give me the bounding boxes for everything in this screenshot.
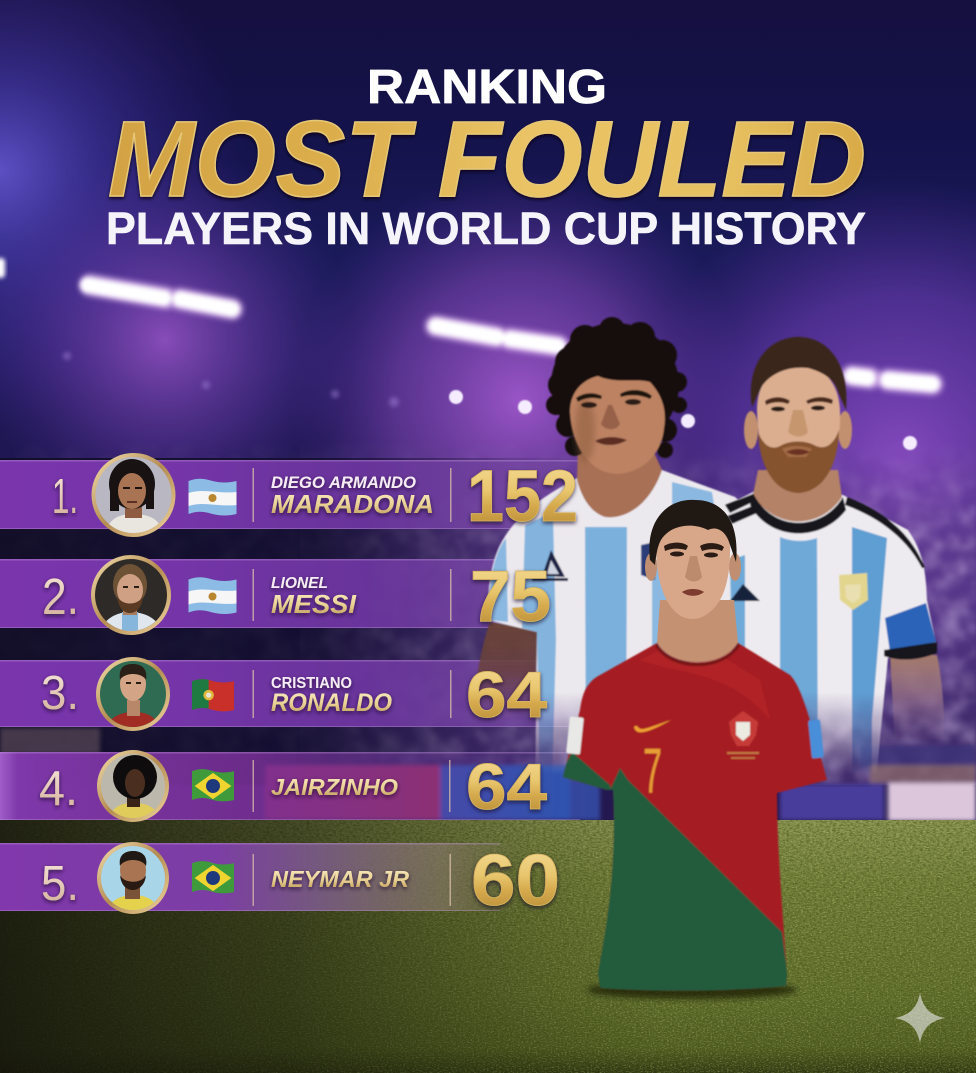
stadium background — [0, 0, 976, 820]
dim bokeh dots — [63, 352, 399, 407]
dividers — [252, 854, 451, 906]
shirt number: 7 — [643, 735, 662, 807]
face details — [664, 543, 724, 596]
logo — [532, 550, 568, 581]
player name: LIONEL — [271, 575, 328, 592]
title: most fouled: MOST FOULED — [108, 98, 866, 219]
neck — [657, 600, 738, 663]
collar stripes — [845, 497, 925, 568]
arm — [476, 622, 538, 714]
hair — [649, 500, 737, 565]
crowd stands — [68, 456, 976, 785]
row 2: Messi — [42, 555, 551, 637]
crest — [839, 573, 868, 610]
adidas mark — [730, 584, 760, 601]
rank number: 3. — [41, 667, 79, 720]
rank number: 2. — [42, 568, 79, 625]
player name — [271, 473, 434, 519]
crest — [641, 542, 655, 580]
player name: NEYMAR JR — [271, 866, 409, 892]
light bars — [90, 285, 932, 384]
player name — [271, 675, 393, 717]
beard — [758, 430, 839, 493]
player name: MARADONA — [271, 489, 434, 519]
collar — [655, 643, 740, 666]
rank number: 4. — [39, 762, 78, 816]
avatar — [92, 453, 176, 537]
captain armband — [885, 603, 936, 652]
dividers — [252, 569, 452, 621]
dividers — [252, 468, 452, 522]
value: 64 — [466, 750, 547, 823]
grass pitch — [0, 820, 976, 1073]
face — [570, 376, 665, 474]
nike swoosh — [634, 720, 671, 732]
flag: Brazil — [192, 768, 234, 804]
dividers — [252, 760, 450, 812]
player name: RONALDO — [271, 689, 393, 717]
rank number: 1. — [52, 470, 78, 524]
stripes — [779, 536, 818, 722]
flag: Argentina — [188, 478, 236, 518]
ears — [645, 553, 657, 581]
face — [756, 366, 842, 449]
row 3: Ronaldo — [41, 657, 547, 731]
green lower section — [555, 650, 790, 995]
flag: Portugal — [192, 678, 234, 714]
face details — [576, 390, 652, 445]
value: 64 — [466, 658, 547, 731]
title: ranking: RANKING — [367, 61, 607, 114]
title block — [106, 61, 866, 254]
hair — [546, 317, 687, 458]
light dots — [449, 390, 917, 450]
player name: CRISTIANO — [271, 675, 352, 692]
sleeve patches — [566, 716, 584, 755]
player name — [271, 575, 357, 619]
dividers — [252, 670, 452, 718]
avatar — [96, 657, 170, 731]
shirt — [487, 469, 739, 772]
ears — [744, 411, 758, 449]
portugal crest — [727, 711, 759, 759]
player: Ronaldo — [555, 500, 827, 995]
value: 152 — [467, 456, 578, 537]
flag: Argentina — [188, 576, 236, 616]
title: subtitle: PLAYERS IN WORLD CUP HISTORY — [106, 203, 866, 254]
advertising boards — [0, 745, 976, 821]
flag: Brazil — [192, 860, 234, 896]
row 4: Jairzinho — [39, 750, 547, 823]
hair — [751, 337, 846, 410]
face details — [765, 397, 833, 455]
stripes — [584, 526, 628, 691]
row 5: Neymar Jr — [41, 841, 560, 921]
avatar — [91, 555, 171, 635]
value: 75 — [470, 557, 551, 637]
avatar — [97, 842, 169, 914]
jersey — [555, 643, 827, 995]
rank row bands — [0, 460, 600, 911]
value: 60 — [471, 841, 560, 921]
floodlights — [0, 258, 932, 450]
player name: DIEGO ARMANDO — [271, 473, 416, 492]
player: Messi — [723, 337, 944, 790]
arm — [890, 654, 944, 734]
shirt — [723, 491, 937, 790]
player name: MESSI — [271, 589, 357, 619]
player name: JAIRZINHO — [271, 774, 398, 800]
player: Maradona — [476, 316, 739, 772]
row 1: Maradona — [52, 453, 578, 537]
neck — [577, 448, 662, 517]
avatar — [97, 750, 169, 822]
neck — [753, 470, 842, 522]
rank number: 5. — [41, 857, 79, 911]
face — [656, 512, 730, 619]
icon: sparkle watermark — [895, 993, 945, 1043]
